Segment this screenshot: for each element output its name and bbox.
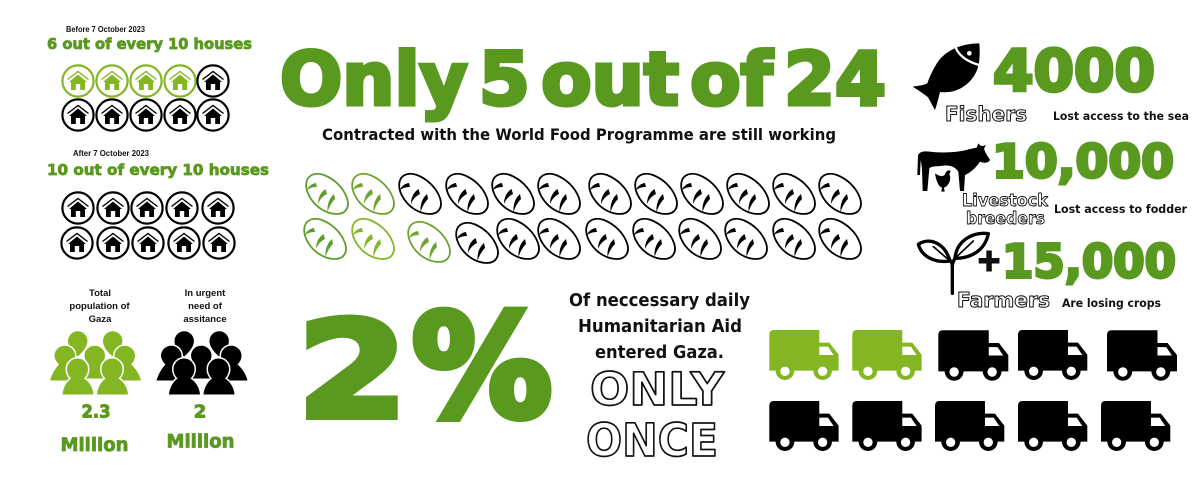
- big stat: 2%: [297, 285, 552, 450]
- stat: 4000: 4000: [993, 38, 1155, 104]
- plus sign: +: [976, 244, 1002, 278]
- label: in urgent need of assistance: need of: [188, 301, 223, 312]
- stat: 2: 2: [194, 402, 206, 422]
- outlined label: breeders: breeders: [966, 209, 1045, 229]
- label: total population of Gaza: population of: [69, 301, 130, 312]
- icon: plant: [918, 233, 988, 293]
- icon: fish: [913, 43, 980, 110]
- panel: fishers: [913, 38, 1189, 126]
- outlined text: ONCE: ONCE: [586, 414, 718, 467]
- line one: Of neccessary daily: [569, 290, 750, 311]
- outlined label: Livestock: Livestock: [962, 191, 1049, 211]
- line three: entered Gaza.: [595, 342, 724, 363]
- heading: 10 out of every 10 houses: 10 out of every 10 houses: [47, 161, 269, 179]
- title: Only 5 out of 24: [280, 38, 886, 122]
- text block: humanitarian aid: [569, 290, 750, 363]
- chart: 10 trucks: [769, 330, 1177, 451]
- note: are losing crops: Are losing crops: [1062, 296, 1161, 310]
- panel: population: [50, 288, 248, 456]
- icon: cow and chicken: [917, 143, 990, 192]
- panel: livestock breeders: [917, 134, 1187, 229]
- label: after date: After 7 October 2023: [73, 149, 150, 158]
- panel: farmers: [918, 233, 1176, 312]
- label: before date: Before 7 October 2023: [66, 25, 146, 34]
- digit 2: 2: [297, 293, 408, 449]
- icon: black crowd: [156, 331, 248, 394]
- label: total population of Gaza: Gaza: [89, 314, 112, 325]
- stat unit: Million second: Million: [166, 430, 234, 452]
- percent sign: %: [412, 285, 552, 450]
- subtitle: Contracted with the World Food Programme are still working: [322, 125, 836, 144]
- icon grid: houses after: [61, 192, 235, 259]
- label: total population of Gaza: Total: [89, 288, 111, 299]
- stat unit: Million green: Million: [60, 434, 128, 456]
- label: in urgent need of assistance: In urgent: [185, 288, 226, 299]
- chart: 24 bread icons: [304, 174, 861, 263]
- stat: 15,000: 15,000: [1002, 234, 1176, 288]
- icon: green crowd: [50, 331, 141, 394]
- panel: houses before and after: [47, 25, 269, 259]
- stat: 2.3: 2.3: [82, 402, 110, 422]
- label: in urgent need of assistance: assitance: [183, 314, 227, 325]
- note: lost access to the sea: Lost access to the sea: [1053, 109, 1189, 123]
- heading: 6 out of every 10 houses: 6 out of every 10 houses: [47, 36, 252, 53]
- outlined text: ONLY: ONLY: [590, 363, 725, 416]
- line two: Humanitarian Aid: [578, 316, 742, 337]
- outlined label: Fishers: Fishers: [945, 102, 1027, 126]
- icon grid: houses before: [62, 65, 229, 131]
- note: lost access to fodder: Lost access to fodder: [1054, 202, 1187, 216]
- outlined label: Farmers: Farmers: [957, 288, 1050, 312]
- stat: 10,000: 10,000: [992, 134, 1174, 188]
